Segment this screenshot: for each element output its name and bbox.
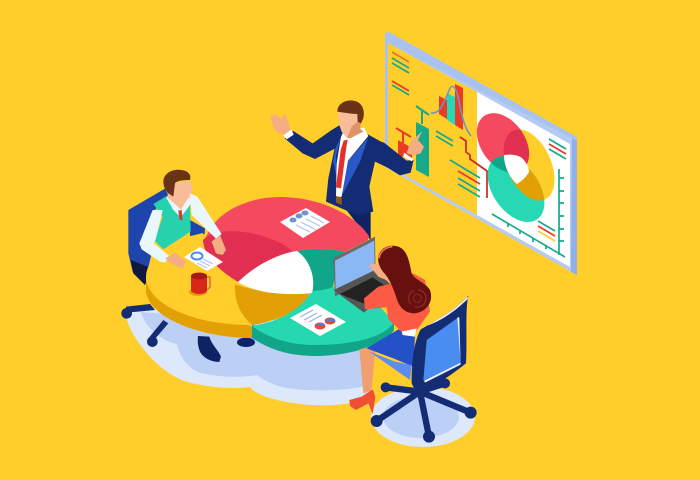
table red sector	[205, 197, 369, 270]
presenter tie	[336, 140, 348, 188]
red mug	[189, 272, 210, 296]
document on teal table	[290, 304, 346, 336]
document on red table	[280, 208, 330, 238]
board axis chart	[492, 169, 565, 257]
seated man with chair	[121, 170, 255, 362]
table edge	[146, 277, 253, 338]
board text lines	[392, 52, 566, 241]
table orange sector	[235, 284, 310, 325]
board bar chart	[431, 84, 471, 136]
presenter belt	[336, 196, 342, 205]
office chair back	[128, 189, 168, 285]
meeting table	[146, 197, 394, 356]
board venn chart	[476, 113, 555, 222]
seated man head	[167, 181, 192, 209]
seated man left sleeve	[139, 210, 169, 263]
office chair base	[126, 304, 168, 342]
presenter left hand	[270, 114, 291, 135]
table yellow sector	[146, 233, 252, 325]
seated man right sleeve	[190, 193, 222, 239]
floor shadow under table	[126, 306, 372, 405]
woman blouse	[364, 273, 430, 335]
presenter shirt	[336, 127, 368, 197]
woman leg and shoe	[359, 345, 377, 393]
laptop	[333, 237, 393, 313]
woman chair and figure	[349, 246, 477, 443]
seated man collar and tie	[166, 196, 191, 217]
board candlestick bars	[396, 106, 429, 177]
document on yellow table	[184, 247, 223, 271]
seated man vest	[153, 196, 191, 249]
presenter right arm	[370, 138, 414, 175]
illustration: business meeting	[121, 32, 577, 447]
floor shadow under chair	[371, 387, 475, 447]
board step line	[460, 137, 487, 198]
presenter head	[338, 110, 360, 138]
seated man shoes	[198, 336, 221, 362]
board frame	[385, 33, 577, 275]
table dark teal sector	[297, 249, 345, 291]
woman skirt	[367, 329, 415, 367]
office chair back	[412, 296, 468, 390]
table white sector	[238, 251, 313, 294]
woman hair	[378, 246, 431, 313]
board yellow panel	[388, 43, 477, 215]
presenter jacket	[326, 126, 400, 215]
presentation board	[385, 32, 577, 275]
table dark red sector	[203, 231, 292, 282]
presenter left arm	[285, 125, 343, 159]
board white panel	[477, 92, 570, 267]
seated man arms and hands	[139, 193, 226, 268]
presenter legs	[340, 202, 371, 240]
woman arm and hand	[369, 263, 390, 282]
table teal sector	[252, 284, 394, 345]
office chair base	[377, 383, 471, 437]
seated man right hand	[212, 235, 226, 255]
standing presenter	[270, 100, 424, 240]
presenter right hand	[403, 153, 413, 161]
seated man left hand	[165, 253, 186, 268]
